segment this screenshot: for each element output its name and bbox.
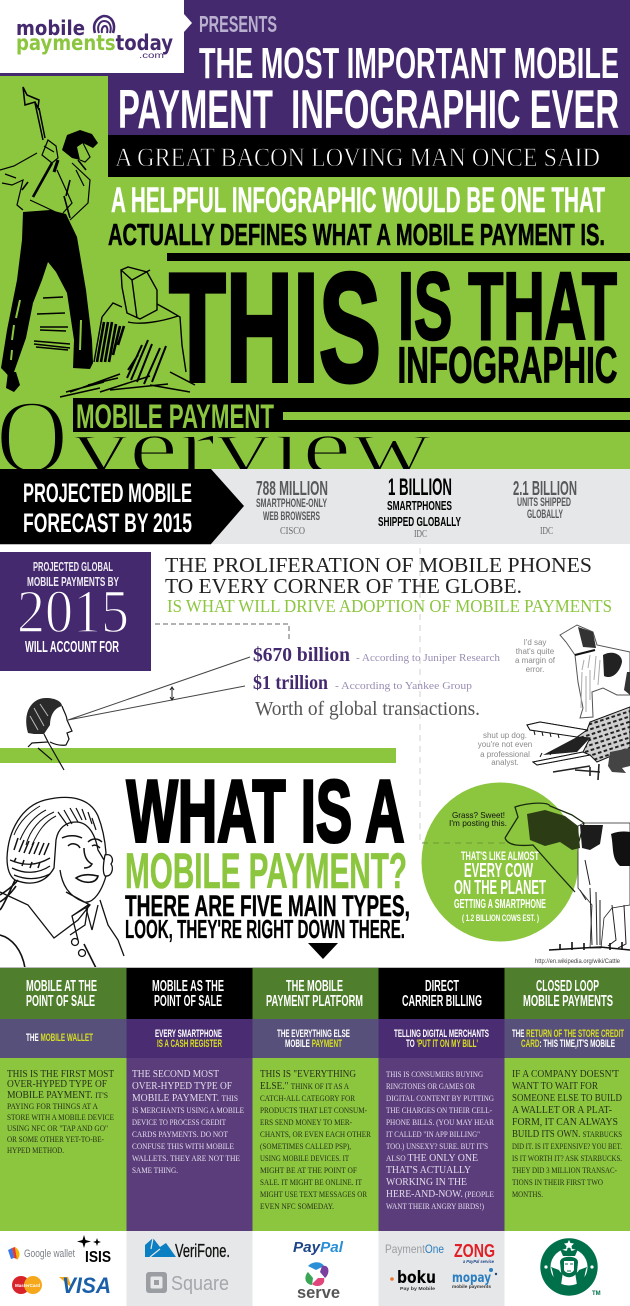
column 4: direct carrier billing: TOO.) UNSEXY? SURE. BUT IT'S bbox=[386, 1142, 488, 1151]
column 3: the mobile payment platform: THIS IS "EVERYTHING bbox=[260, 1069, 356, 1080]
column 4: direct carrier billing bbox=[386, 978, 495, 1211]
callout: cow statistic: EVERY COW bbox=[464, 860, 533, 882]
column 1: mobile at the point of sale: USING NFC OR "TAP AND GO" bbox=[7, 1124, 108, 1133]
column 2: mobile as the point of sale: IS MERCHANTS USING A MOBILE bbox=[132, 1106, 244, 1115]
logos: paymentone, zong, boku, mopay: a PayPal service bbox=[463, 1259, 494, 1264]
panel: global mobile payments 2015: WILL ACCOUNT FOR bbox=[25, 639, 119, 656]
column 4: direct carrier billing: DIGITAL CONTENT BY PUTTING bbox=[386, 1094, 494, 1103]
logos: google wallet, isis, mastercard, visa bbox=[8, 1235, 111, 1298]
panel: projected mobile forecast: PROJECTED MOBILE bbox=[23, 478, 192, 508]
callout: cow statistic: GETTING A SMARTPHONE bbox=[454, 897, 546, 911]
column 1: mobile at the point of sale: MOBILE AT THE bbox=[26, 978, 97, 995]
panel: global mobile payments 2015: MOBILE PAYMENTS BY bbox=[27, 574, 119, 589]
column 3: the mobile payment platform: THE EVERYTHING ELSE bbox=[277, 1028, 350, 1040]
column 4: direct carrier billing: THE CHARGES ON THEIR CELL- bbox=[386, 1106, 492, 1115]
logo: starbucks bbox=[540, 1238, 601, 1297]
panel: column grid bbox=[0, 967, 630, 1306]
figures: global transactions: - According to Juniper Research bbox=[356, 652, 501, 664]
speech: dog: I'd say bbox=[524, 638, 546, 647]
panel: projected mobile forecast bbox=[0, 469, 630, 545]
illustration: portrait in wig bbox=[0, 797, 124, 968]
logos: paymentone, zong, boku, mopay: PaymentOne bbox=[385, 1242, 444, 1256]
logos: paymentone, zong, boku, mopay: ZONG bbox=[454, 1241, 495, 1261]
heading: proliferation of mobile phones: THE PROLIFERATION OF MOBILE PHONES bbox=[165, 553, 592, 577]
logos: paymentone, zong, boku, mopay: mopay bbox=[452, 1271, 491, 1286]
column 3: the mobile payment platform: PRODUCTS THAT LET CONSUM- bbox=[260, 1106, 367, 1115]
panel: global mobile payments 2015: 2015 bbox=[17, 579, 129, 646]
illustration: dog bbox=[560, 625, 630, 718]
source url: http://en.wikipedia.org/wiki/Cattle bbox=[535, 959, 621, 965]
panel: global mobile payments 2015 bbox=[0, 552, 151, 671]
column 2: mobile as the point of sale: SAME THING. bbox=[132, 1166, 178, 1175]
column 2: mobile as the point of sale: THE SECOND MOST bbox=[132, 1069, 220, 1080]
stat: 2.1 billion: GLOBALLY bbox=[527, 509, 563, 521]
column 1: mobile at the point of sale: OR SOME OTHER YET-TO-BE- bbox=[7, 1135, 104, 1144]
column 3: the mobile payment platform: MOBILE PAYMENT bbox=[285, 1038, 342, 1050]
column 4: direct carrier billing: RINGTONES OR GAMES OR bbox=[386, 1082, 476, 1091]
column 4: direct carrier billing: WORKING IN THE bbox=[386, 1177, 467, 1188]
column 3: the mobile payment platform: PAYMENT PLATFORM bbox=[266, 993, 363, 1010]
presents label: PRESENTS bbox=[199, 11, 277, 37]
column 4: direct carrier billing: TELLING DIGITAL MERCHANTS bbox=[394, 1028, 489, 1040]
stat: 2.1 billion: 2.1 BILLION bbox=[513, 478, 577, 500]
speech: dog: a margin of bbox=[515, 656, 556, 665]
column 1: mobile at the point of sale: MOBILE PAYMENT. IT'S bbox=[7, 1090, 108, 1101]
callout: cow statistic bbox=[422, 782, 578, 942]
logos: paymentone, zong, boku, mopay bbox=[385, 1241, 497, 1291]
logos: verifone, square: Square bbox=[171, 1273, 229, 1295]
stat: 788 million: WEB BROWSERS bbox=[263, 511, 320, 523]
column 2: mobile as the point of sale: EVERY SMARTPHONE bbox=[155, 1028, 222, 1040]
column 3: the mobile payment platform: THE MOBILE bbox=[286, 978, 343, 995]
heading: mobile payment overview: verview bbox=[73, 403, 432, 491]
column 2: mobile as the point of sale: CARDS PAYMENTS. DO NOT bbox=[132, 1130, 228, 1139]
stat: 788 million: 788 MILLION bbox=[256, 478, 328, 500]
subtitle band text: A GREAT BACON LOVING MAN ONCE SAID bbox=[115, 143, 600, 172]
column 2: mobile as the point of sale: IS A CASH REGISTER bbox=[157, 1038, 222, 1050]
callout: cow statistic: ( 1.2 BILLION COWS EST. ) bbox=[462, 913, 539, 924]
column 4: direct carrier billing: THAT'S ACTUALLY bbox=[386, 1165, 471, 1176]
illustration: crocodile bbox=[527, 707, 630, 780]
speech: dog: that's quite bbox=[516, 647, 555, 656]
logos: paymentone, zong, boku, mopay: Pay by Mobile bbox=[400, 1286, 436, 1291]
column 3: the mobile payment platform: EVEN NFC SOMEDAY. bbox=[260, 1202, 334, 1211]
stat: 2.1 billion bbox=[513, 478, 577, 537]
speech: crocodile: shut up dog. bbox=[483, 731, 527, 740]
panel: hero background bbox=[0, 0, 630, 469]
trousers bbox=[1, 210, 93, 380]
callout: cow statistic: ON THE PLANET bbox=[454, 877, 546, 899]
column 4: direct carrier billing: CARRIER BILLING bbox=[402, 993, 482, 1010]
quote bbox=[108, 181, 605, 252]
column 1: mobile at the point of sale: THIS IS THE FIRST MOST bbox=[7, 1069, 114, 1080]
dashed connector bbox=[155, 624, 289, 642]
column 3: the mobile payment platform: USING MOBILE DEVICES. IT bbox=[260, 1154, 349, 1163]
figures: global transactions bbox=[253, 644, 501, 720]
illustration: man chopping wood bbox=[0, 87, 195, 397]
stat: 788 million: SMARTPHONE-ONLY bbox=[256, 498, 327, 510]
figures: global transactions: Worth of global transactions. bbox=[255, 698, 480, 720]
logos: google wallet, isis, mastercard, visa: VISA bbox=[62, 1273, 111, 1298]
panel: global mobile payments 2015: PROJECTED GLOBAL bbox=[33, 559, 113, 574]
down arrow bbox=[308, 943, 338, 959]
stat: 2.1 billion: IDC bbox=[540, 526, 553, 537]
column 5: closed loop mobile payments: BUILD ITS OWN. STARBUCKS bbox=[512, 1129, 622, 1140]
column 4: direct carrier billing: THIS IS CONSUMERS BUYING bbox=[386, 1070, 483, 1079]
column 3: the mobile payment platform: CHANTS, OR EVEN EACH OTHER bbox=[260, 1130, 372, 1139]
column 5: closed loop mobile payments: FORM, IT CAN ALWAYS bbox=[512, 1117, 618, 1128]
speech: crocodile: a professional bbox=[480, 750, 530, 759]
column 2: mobile as the point of sale: DEVICE TO PROCESS CREDIT bbox=[132, 1118, 226, 1127]
logos: google wallet, isis, mastercard, visa: Google wallet bbox=[24, 1248, 75, 1260]
speech: crocodile bbox=[478, 731, 532, 767]
callout: cow statistic: Grass? Sweet! bbox=[452, 810, 505, 820]
column 1: mobile at the point of sale bbox=[7, 978, 114, 1155]
logo: starbucks: TM bbox=[592, 1291, 601, 1297]
column 4: direct carrier billing: IT CALLED "IN APP BILLING" bbox=[386, 1130, 480, 1139]
column 3: the mobile payment platform: SALE. IT MIGHT BE ONLINE. IT bbox=[260, 1178, 362, 1187]
column 3: the mobile payment platform: MIGHT BE AT THE POINT OF bbox=[260, 1166, 358, 1175]
column 3: the mobile payment platform: ELSE." THINK OF IT AS A bbox=[260, 1081, 349, 1092]
green accent bar bbox=[0, 748, 396, 763]
stat: 788 million: CISCO bbox=[280, 526, 305, 537]
column 5: closed loop mobile payments: A WALLET OR A PLAT- bbox=[512, 1105, 612, 1116]
logo: mobile payments today: paymentstoday bbox=[16, 31, 173, 55]
callout: cow statistic: I'm posting this. bbox=[449, 818, 507, 828]
logos: paypal, serve: serve bbox=[297, 1283, 340, 1302]
stat: 788 million bbox=[256, 478, 328, 537]
logo: mobile payments today: .com bbox=[139, 51, 164, 60]
column 5: closed loop mobile payments: TIONS IN THEIR FIRST TWO bbox=[512, 1178, 603, 1187]
heading block: this is that infographic: THIS bbox=[169, 241, 381, 414]
illustration: cow bbox=[505, 803, 630, 950]
column 5: closed loop mobile payments bbox=[512, 978, 624, 1199]
stat: 1 billion: SMARTPHONES bbox=[387, 498, 452, 513]
speech: crocodile: analyst. bbox=[491, 758, 519, 767]
column 4: direct carrier billing: DIRECT bbox=[425, 978, 459, 995]
logo: mobile payments today bbox=[0, 0, 192, 76]
column 4: direct carrier billing: TO 'PUT IT ON MY BILL' bbox=[406, 1038, 478, 1050]
heading: what is a mobile payment bbox=[125, 762, 410, 944]
speech: dog: error. bbox=[526, 665, 544, 674]
heading: proliferation of mobile phones: IS WHAT WILL DRIVE ADOPTION OF MOBILE PAYMENTS bbox=[167, 596, 612, 616]
logos: google wallet, isis, mastercard, visa: MasterCard bbox=[15, 1283, 40, 1288]
logos: paypal, serve bbox=[293, 1239, 344, 1302]
column 2: mobile as the point of sale: MOBILE AS THE bbox=[152, 978, 224, 995]
column 5: closed loop mobile payments: THEY DID 3 MILLION TRANSAC- bbox=[512, 1166, 617, 1175]
figures: global transactions: $1 trillion bbox=[253, 672, 328, 694]
column 3: the mobile payment platform bbox=[260, 978, 372, 1211]
stat: 1 billion: SHIPPED GLOBALLY bbox=[378, 514, 461, 529]
heading: proliferation of mobile phones: TO EVERY CORNER OF THE GLOBE. bbox=[165, 574, 522, 598]
column 2: mobile as the point of sale: MOBILE PAYMENT. THIS bbox=[132, 1093, 238, 1104]
logos: paypal, serve: PayPal bbox=[293, 1239, 344, 1256]
logos: google wallet, isis, mastercard, visa: ISIS bbox=[85, 1249, 111, 1266]
heading: what is a mobile payment: THERE ARE FIVE MAIN TYPES, bbox=[125, 890, 410, 923]
column 2: mobile as the point of sale bbox=[132, 978, 244, 1175]
logos: verifone, square bbox=[145, 1238, 230, 1295]
column 4: direct carrier billing: PHONE BILLS. (YOU MAY HEAR bbox=[386, 1118, 495, 1127]
stat: 1 billion: 1 BILLION bbox=[388, 474, 452, 501]
axe bbox=[23, 87, 45, 140]
logo: mobile payments today: mobile bbox=[16, 16, 85, 40]
column 5: closed loop mobile payments: MONTHS. bbox=[512, 1190, 543, 1199]
heading: proliferation of mobile phones bbox=[165, 553, 612, 616]
column 3: the mobile payment platform: (SOMETIMES CALLED PSP), bbox=[260, 1142, 351, 1151]
column 1: mobile at the point of sale: POINT OF SALE bbox=[26, 993, 95, 1010]
title bbox=[118, 39, 619, 140]
column 3: the mobile payment platform: ERS SEND MONEY TO MER- bbox=[260, 1118, 352, 1127]
column 1: mobile at the point of sale: OVER-HYPED TYPE OF bbox=[7, 1079, 107, 1090]
stat: 1 billion: IDC bbox=[414, 529, 427, 540]
figures: global transactions: $670 billion bbox=[253, 644, 350, 666]
stat: 2.1 billion: UNITS SHIPPED bbox=[517, 497, 571, 509]
column 4: direct carrier billing: HERE-AND-NOW. (PEOPLE bbox=[386, 1189, 494, 1200]
column 2: mobile as the point of sale: POINT OF SALE bbox=[154, 993, 222, 1010]
hair, hands and shirt bbox=[62, 130, 98, 160]
column 1: mobile at the point of sale: THE MOBILE WALLET bbox=[26, 1032, 93, 1044]
logos: verifone, square: VeriFone. bbox=[175, 1241, 230, 1261]
column 3: the mobile payment platform: MIGHT USE TEXT MESSAGES OR bbox=[260, 1190, 368, 1199]
column 4: direct carrier billing: WANT THEIR ANGRY BIRDS!) bbox=[386, 1202, 484, 1211]
heading: mobile payment overview bbox=[0, 378, 630, 495]
column 2: mobile as the point of sale: CONFUSE THIS WITH MOBILE bbox=[132, 1142, 234, 1151]
column 2: mobile as the point of sale: WALLETS. THEY ARE NOT THE bbox=[132, 1154, 240, 1163]
column 5: closed loop mobile payments: WANT TO WAIT FOR bbox=[512, 1081, 598, 1092]
logos: paymentone, zong, boku, mopay: boku bbox=[397, 1268, 436, 1288]
heading: what is a mobile payment: WHAT IS A bbox=[126, 762, 404, 860]
callout: cow statistic: THAT'S LIKE ALMOST bbox=[461, 851, 539, 863]
heading: what is a mobile payment: MOBILE PAYMENT? bbox=[125, 843, 407, 899]
column 4: direct carrier billing: ALSO THE ONLY ONE bbox=[386, 1153, 478, 1164]
column 1: mobile at the point of sale: STORE WITH A MOBILE DEVICE bbox=[7, 1113, 114, 1122]
column 1: mobile at the point of sale: HYPED METHOD. bbox=[7, 1146, 64, 1155]
speech: crocodile: you're not even bbox=[478, 740, 532, 749]
heading: what is a mobile payment: LOOK, THEY'RE RIGHT DOWN THERE. bbox=[125, 914, 405, 944]
stat: 1 billion bbox=[378, 474, 461, 540]
illustration: man looking through sight lines bbox=[26, 657, 250, 770]
logos: paymentone, zong, boku, mopay: mobile payments bbox=[452, 1284, 492, 1289]
column 5: closed loop mobile payments: IF A COMPANY DOESN'T bbox=[512, 1069, 620, 1080]
stump and chopping block bbox=[34, 267, 195, 397]
heading: mobile payment overview: MOBILE PAYMENT bbox=[76, 398, 274, 436]
panel: projected mobile forecast: FORECAST BY 2015 bbox=[23, 508, 192, 538]
speech: dog bbox=[515, 638, 556, 674]
figures: global transactions: - According to Yankee Group bbox=[335, 680, 473, 692]
column 3: the mobile payment platform: CATCH-ALL CATEGORY FOR bbox=[260, 1094, 356, 1103]
column 2: mobile as the point of sale: OVER-HYPED TYPE OF bbox=[132, 1081, 232, 1092]
column 1: mobile at the point of sale: PAYING FOR THINGS AT A bbox=[7, 1102, 98, 1111]
